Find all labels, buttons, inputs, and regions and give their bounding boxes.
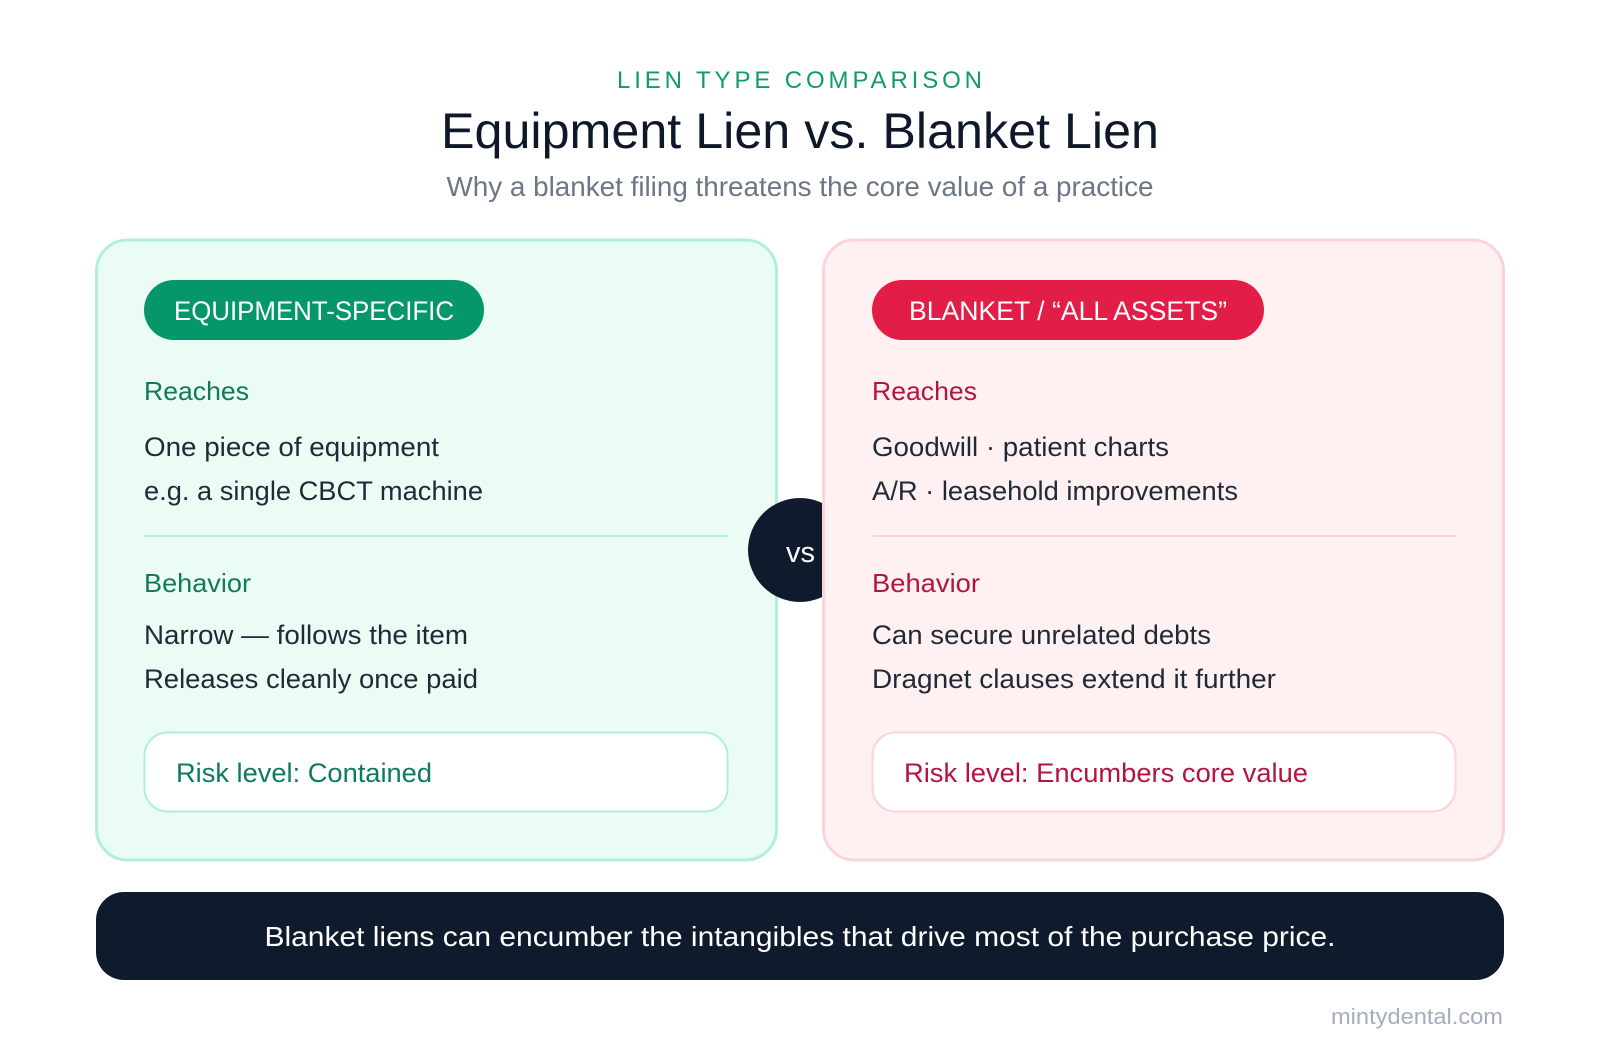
text: reaches details: A/R · leasehold improvements	[872, 476, 1238, 506]
takeaway bar: Blanket liens can encumber the intangibles that drive most of the purchase price.	[264, 921, 1336, 952]
text: behavior details: Can secure unrelated debts	[872, 620, 1211, 650]
badge: blanket all assets	[872, 280, 1264, 340]
heading: behavior: Behavior	[144, 568, 251, 598]
callout: core value risk: Risk level: Encumbers core value	[904, 758, 1308, 788]
text: behavior details: Releases cleanly once paid	[144, 664, 478, 694]
panel background: equipment	[96, 240, 776, 860]
heading: reaches: Reaches	[872, 376, 977, 406]
eyebrow: LIEN TYPE COMPARISON	[617, 67, 982, 94]
callout: core value risk	[872, 732, 1456, 812]
badge: equipment-specific	[144, 280, 484, 340]
callout: contained risk: Risk level: Contained	[176, 758, 432, 788]
text: reaches details: One piece of equipment	[144, 432, 439, 462]
callout: contained risk	[144, 732, 728, 812]
takeaway bar	[96, 892, 1504, 980]
vs badge	[748, 498, 852, 602]
text: reaches details	[144, 432, 483, 506]
text: reaches details: e.g. a single CBCT machine	[144, 476, 483, 506]
panel background: blanket	[824, 240, 1504, 860]
footer source: mintydental.com	[1331, 1004, 1503, 1029]
vs badge: vs	[786, 537, 815, 569]
title: Equipment Lien vs. Blanket Lien	[441, 103, 1159, 159]
panel: equipment-specific lien	[96, 240, 776, 860]
text: behavior details: Dragnet clauses extend it further	[872, 664, 1276, 694]
text: behavior details: Narrow — follows the item	[144, 620, 468, 650]
text: reaches details: Goodwill · patient charts	[872, 432, 1169, 462]
badge: equipment-specific: EQUIPMENT-SPECIFIC	[174, 296, 454, 326]
text: behavior details	[144, 620, 478, 694]
heading: behavior: Behavior	[872, 568, 980, 598]
panel: blanket lien	[824, 240, 1504, 860]
subtitle: Why a blanket filing threatens the core value of a practice	[446, 171, 1154, 202]
badge: blanket all assets: BLANKET / “ALL ASSETS”	[909, 296, 1227, 326]
text: behavior details	[872, 620, 1276, 694]
heading: reaches: Reaches	[144, 376, 249, 406]
text: reaches details	[872, 432, 1238, 506]
